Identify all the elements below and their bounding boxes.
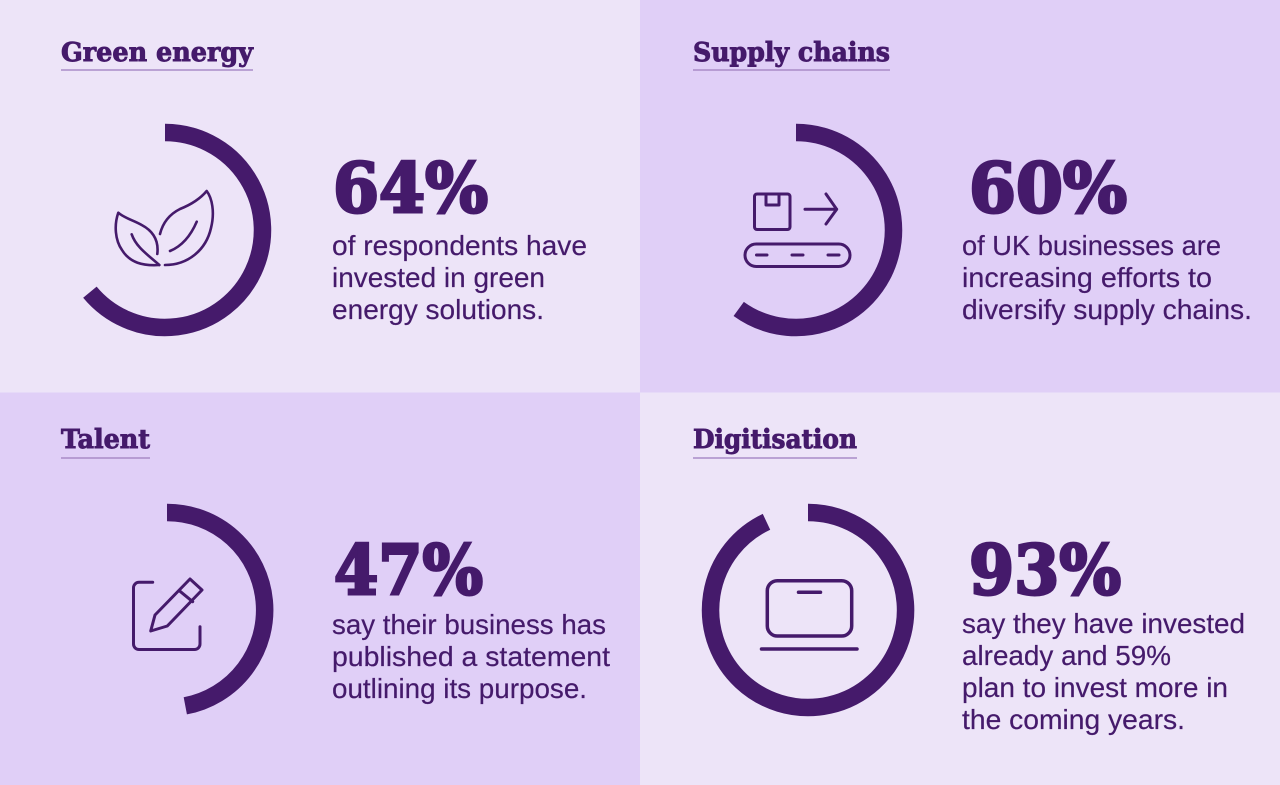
chart: 64% ring bbox=[90, 132, 262, 328]
chart: 47% ring bbox=[167, 512, 265, 706]
text: green energy description bbox=[332, 230, 587, 325]
icon: conveyor belt with box bbox=[745, 194, 850, 266]
panel: digitisation bbox=[640, 392, 1280, 785]
text: talent description: say their business has bbox=[332, 609, 606, 640]
stat: 93%: 93% bbox=[969, 531, 1121, 611]
panel: green energy bbox=[0, 0, 640, 392]
icon: pencil and paper bbox=[134, 579, 202, 650]
text: green energy description: invested in green bbox=[332, 262, 545, 293]
stat: 47%: 47% bbox=[334, 531, 483, 611]
text: digitisation description: say they have invested bbox=[962, 608, 1245, 639]
text: talent description bbox=[332, 609, 610, 704]
heading: green energy: Green energy bbox=[61, 38, 254, 68]
text: supply chains description bbox=[962, 230, 1252, 325]
text: green energy description: energy solutions. bbox=[332, 294, 544, 325]
text: supply chains description: diversify supply chains. bbox=[962, 294, 1252, 325]
text: supply chains description: of UK businesses are bbox=[962, 230, 1221, 261]
text: digitisation description bbox=[962, 608, 1245, 735]
heading: supply chains: Supply chains bbox=[693, 38, 890, 68]
text: green energy description: of respondents have bbox=[332, 230, 587, 261]
text: digitisation description: the coming years. bbox=[962, 704, 1185, 735]
icon: laptop bbox=[762, 581, 857, 649]
stat: 60%: 60% bbox=[969, 149, 1127, 229]
text: supply chains description: increasing efforts to bbox=[962, 262, 1212, 293]
heading: digitisation: Digitisation bbox=[693, 425, 857, 455]
text: digitisation description: already and 59% bbox=[962, 640, 1171, 671]
stat: 64%: 64% bbox=[333, 149, 488, 229]
heading: talent: Talent bbox=[61, 425, 150, 455]
panel: talent bbox=[0, 392, 640, 785]
text: talent description: published a statement bbox=[332, 641, 610, 672]
chart: 93% ring bbox=[711, 512, 906, 708]
chart: 60% ring bbox=[739, 132, 893, 328]
text: digitisation description: plan to invest more in bbox=[962, 672, 1228, 703]
icon: leaves bbox=[116, 191, 213, 265]
text: talent description: outlining its purpose. bbox=[332, 673, 587, 704]
panel: supply chains bbox=[640, 0, 1280, 392]
